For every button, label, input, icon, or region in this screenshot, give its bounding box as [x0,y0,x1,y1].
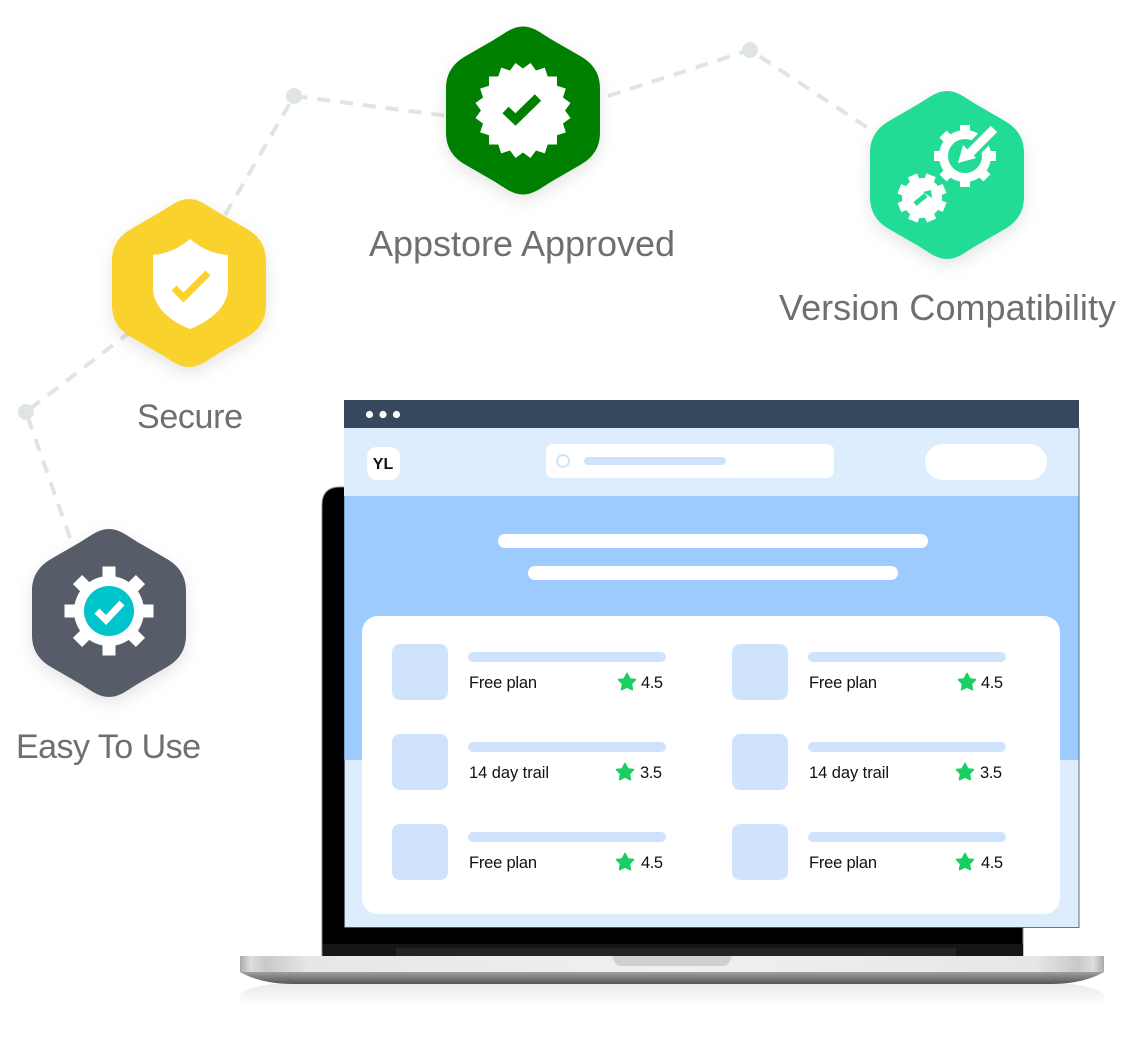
search bar [546,444,834,478]
label: Appstore Approved: Appstore Approved [369,223,675,264]
label: Easy To Use: Easy To Use [16,728,201,766]
row: left 3 [392,824,666,880]
row: right 1: 4.5 [981,674,1003,692]
row: right 3 [732,824,1006,880]
row: right 3: Free plan [809,854,877,872]
logo: YL [373,456,393,473]
icon: version compatibility gears hexagon [870,91,1024,259]
row: left 1 [392,644,666,700]
row: left 2 [392,734,666,790]
row: left 3: 4.5 [641,854,663,872]
row: left 3: Free plan [469,854,537,872]
row: right 3: 4.5 [981,854,1003,872]
row: left 1: 4.5 [641,674,663,692]
window dots [366,411,400,418]
icon: easy to use gear hexagon [32,529,186,697]
laptop [240,487,1104,1005]
title bar [344,400,1079,428]
dashed connector path [18,42,874,538]
label: Secure: Secure [137,398,243,436]
row: right 2 [732,734,1006,790]
row: right 2: 3.5 [980,764,1002,782]
row: right 2: 14 day trail [809,764,889,782]
row: right 1 [732,644,1006,700]
browser window [344,400,1079,928]
logo [367,447,400,480]
row: left 1: Free plan [469,674,537,692]
hero background [344,496,1078,760]
row: right 1: Free plan [809,674,877,692]
icon: appstore approved badge hexagon [446,26,600,194]
row: left 2: 14 day trail [469,764,549,782]
label: Version Compatibility: Version Compatibility [779,287,1116,328]
icon: secure shield hexagon [112,199,266,367]
hero text lines [498,534,928,580]
content card [362,616,1060,914]
row: left 2: 3.5 [640,764,662,782]
header button [925,444,1047,480]
